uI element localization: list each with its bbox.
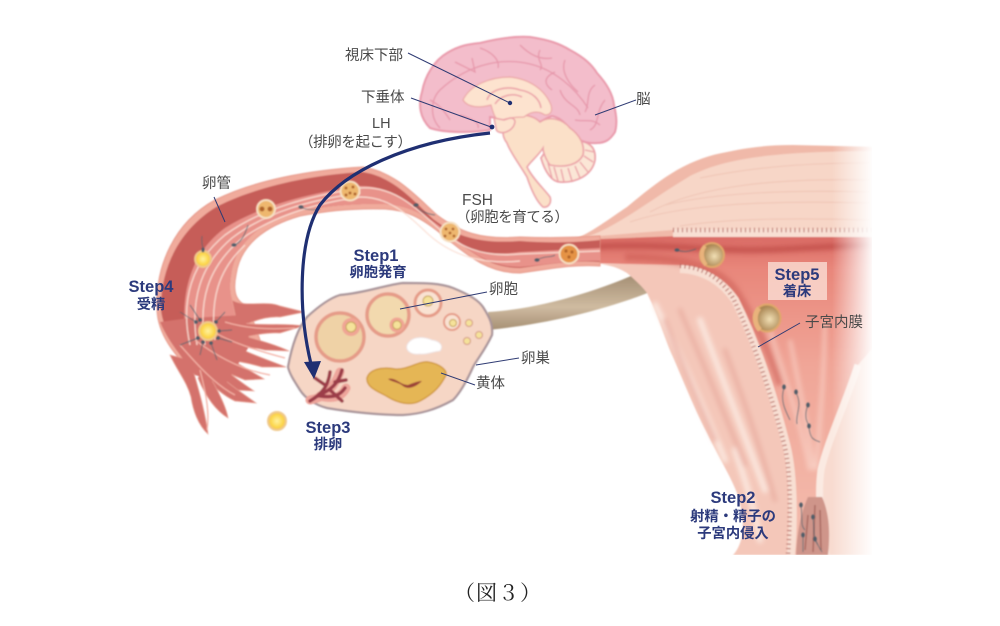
uterus upper wall [572, 145, 880, 240]
embryos [257, 182, 578, 264]
uterine ligament [480, 272, 650, 342]
tube outer [157, 167, 600, 370]
label: ovary: 卵巣 [521, 350, 550, 367]
step 3 [306, 419, 350, 453]
tube lumen [184, 186, 600, 350]
step 5: Step5 [775, 266, 819, 284]
step 4: 受精 [137, 295, 165, 313]
label: follicle: 卵胞 [489, 281, 518, 298]
figure caption: （図３） [454, 581, 542, 605]
label: brain: 脳 [636, 91, 650, 108]
step 1: Step1 [354, 247, 398, 265]
follicle medium [367, 294, 409, 336]
right edge fade [832, 140, 874, 560]
step 5 [768, 262, 827, 300]
follicle large [316, 313, 364, 361]
label: pituitary: 下垂体 [361, 89, 405, 106]
label: oviduct: 卵管 [202, 174, 231, 192]
gyri [430, 45, 605, 130]
illustration: ovary [288, 283, 492, 415]
blastocysts [700, 243, 780, 332]
label: FSH function: （卵胞を育てる） [456, 209, 569, 226]
step 1: 卵胞発育 [349, 263, 407, 281]
label: endometrium: 子宮内膜 [805, 314, 863, 331]
corpus luteum [367, 362, 446, 404]
uterine cavity [575, 235, 880, 555]
cervix [796, 497, 829, 555]
step 2: 射精・精子の [690, 507, 776, 525]
uterus left wall [600, 262, 792, 555]
cerebellum [541, 130, 595, 182]
illustration: uterus [480, 145, 880, 555]
corpus albicans [407, 338, 442, 354]
uterus right body [700, 232, 880, 555]
step 2 [690, 489, 776, 542]
hormone arrow: LH [302, 133, 490, 379]
label: hypothalamus: 視床下部 [345, 47, 403, 64]
inner cream [463, 77, 552, 120]
label: LH: LH [372, 116, 391, 132]
follicle small [415, 290, 482, 344]
step 1 [349, 247, 407, 281]
step 3: Step3 [306, 419, 350, 437]
sperm [180, 205, 822, 552]
leader lines [214, 53, 800, 385]
step 3: 排卵 [314, 435, 342, 453]
step 2: 子宮内侵入 [697, 525, 769, 542]
embryo nuclei [260, 186, 574, 259]
step 2: Step2 [711, 489, 755, 507]
pituitary [494, 118, 515, 133]
tube streaks [187, 188, 600, 345]
illustration: oviduct [157, 167, 600, 434]
label: FSH: FSH [462, 192, 493, 209]
step 5: 着床 [783, 282, 812, 300]
step 4: Step4 [129, 278, 174, 296]
ruptured follicle [310, 370, 346, 401]
egg cells [195, 251, 286, 430]
wall mottling [655, 305, 775, 540]
illustration: eggs and embryos [180, 182, 822, 552]
cerebellum folia [548, 150, 594, 182]
illustration: brain [420, 37, 616, 207]
ovary body [288, 283, 492, 415]
brain stem and cerebellar core [503, 115, 583, 207]
cerebrum [420, 37, 616, 143]
tube muscle [161, 172, 600, 365]
fimbriae [160, 300, 304, 434]
step 4 [129, 278, 174, 313]
endometrium [673, 233, 880, 555]
label: corpus luteum: 黄体 [476, 375, 505, 392]
label: LH function: （排卵を起こす） [299, 134, 412, 151]
